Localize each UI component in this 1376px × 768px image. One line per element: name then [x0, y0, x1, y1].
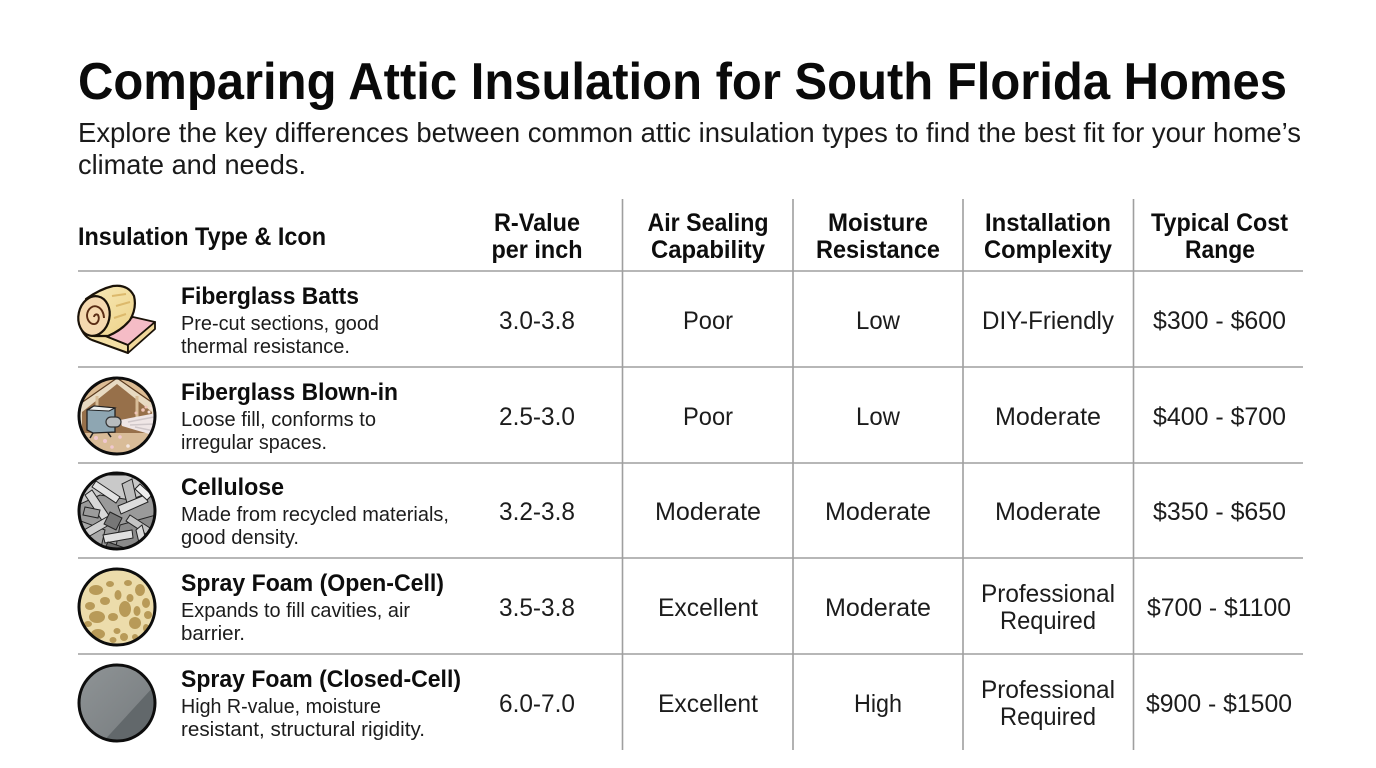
table header row: Moisture — [828, 209, 928, 237]
row: Fiberglass Blown-in: Low — [856, 403, 901, 431]
row: Spray Foam (Closed-Cell): Excellent — [658, 690, 758, 718]
row: Fiberglass Batts: 3.0-3.8 — [499, 307, 575, 335]
table header row: R-Value — [494, 209, 580, 237]
row: Spray Foam (Closed-Cell): $900 - $1500 — [1146, 690, 1292, 718]
icon: blown-in machine in attic — [78, 376, 156, 456]
row: Fiberglass Blown-in: $400 - $700 — [1153, 403, 1286, 431]
table header row: Complexity — [984, 236, 1112, 264]
row: Spray Foam (Open-Cell): Excellent — [658, 594, 758, 622]
table header row: Air Sealing — [648, 209, 768, 237]
name: Fiberglass Batts — [181, 283, 359, 310]
name: Spray Foam (Open-Cell) — [181, 570, 444, 597]
table header row: per inch — [492, 236, 582, 264]
name: Cellulose — [181, 474, 284, 501]
table header row: Insulation Type & Icon — [78, 223, 326, 251]
description — [181, 695, 425, 741]
description: Loose fill, conforms to — [181, 408, 376, 431]
row: Spray Foam (Closed-Cell): Professional — [981, 676, 1115, 704]
table header row: Range — [1185, 236, 1255, 264]
description — [181, 599, 410, 645]
row: Cellulose — [78, 473, 1286, 554]
row: Spray Foam (Open-Cell) — [79, 569, 1291, 645]
row: Fiberglass Batts — [75, 283, 1286, 358]
row: Spray Foam (Open-Cell): Professional — [981, 580, 1115, 608]
table header row: Resistance — [816, 236, 940, 264]
row: Spray Foam (Open-Cell): Required — [1000, 607, 1096, 635]
icon: cellulose fibres — [78, 473, 156, 554]
description: Pre-cut sections, good — [181, 312, 379, 335]
name: Fiberglass Blown-in — [181, 379, 398, 406]
row: Spray Foam (Open-Cell): $700 - $1100 — [1147, 594, 1291, 622]
description — [181, 503, 449, 549]
row: Cellulose: $350 - $650 — [1153, 498, 1286, 526]
icon: open-cell foam — [79, 569, 155, 645]
row: Fiberglass Batts: DIY-Friendly — [982, 307, 1114, 335]
row: Fiberglass Blown-in: Moderate — [995, 403, 1101, 431]
row: Cellulose: Moderate — [825, 498, 931, 526]
row: Spray Foam (Open-Cell): 3.5-3.8 — [499, 594, 575, 622]
row: Fiberglass Blown-in — [74, 371, 1286, 456]
row: Cellulose: Moderate — [655, 498, 761, 526]
description — [181, 312, 379, 358]
description: resistant, structural rigidity. — [181, 718, 425, 741]
subtitle: Explore the key differences between common attic insulation types to find the best fit for your home’s — [78, 117, 1301, 148]
row: Cellulose: Moderate — [995, 498, 1101, 526]
row: Fiberglass Blown-in: 2.5-3.0 — [499, 403, 575, 431]
description: thermal resistance. — [181, 335, 350, 358]
icon: fiberglass roll — [75, 286, 155, 353]
row: Spray Foam (Closed-Cell): High — [854, 690, 902, 718]
name: Spray Foam (Closed-Cell) — [181, 666, 461, 693]
title: Comparing Attic Insulation for South Florida Homes — [78, 53, 1287, 111]
table header row: Installation — [985, 209, 1111, 237]
row: Cellulose: 3.2-3.8 — [499, 498, 575, 526]
description — [181, 408, 376, 454]
icon: closed-cell foam — [79, 665, 155, 745]
row: Spray Foam (Open-Cell): Moderate — [825, 594, 931, 622]
row: Spray Foam (Closed-Cell): Required — [1000, 703, 1096, 731]
row: Fiberglass Batts: Poor — [683, 307, 733, 335]
description: High R-value, moisture — [181, 695, 381, 718]
subtitle — [78, 117, 1301, 180]
row: Fiberglass Batts: $300 - $600 — [1153, 307, 1286, 335]
table header row: Capability — [651, 236, 765, 264]
description: irregular spaces. — [181, 431, 327, 454]
row: Fiberglass Blown-in: Poor — [683, 403, 733, 431]
subtitle: climate and needs. — [78, 149, 306, 180]
description: barrier. — [181, 622, 245, 645]
table header row: Typical Cost — [1151, 209, 1289, 237]
description: Made from recycled materials, — [181, 503, 449, 526]
row: Spray Foam (Closed-Cell): 6.0-7.0 — [499, 690, 575, 718]
description: Expands to fill cavities, air — [181, 599, 410, 622]
row: Spray Foam (Closed-Cell) — [79, 665, 1292, 745]
row: Fiberglass Batts: Low — [856, 307, 901, 335]
table header row — [78, 209, 1289, 264]
description: good density. — [181, 526, 299, 549]
